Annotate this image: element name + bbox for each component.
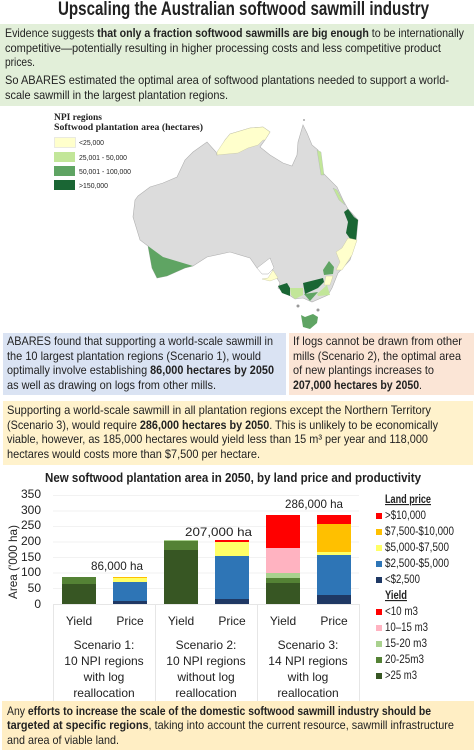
panel: scenario 1 finding: as well as drawing on logs from other mills.	[7, 378, 216, 392]
scenario 3 label: reallocation	[277, 686, 339, 700]
map legend: Softwood plantation area (hectares)	[54, 122, 203, 132]
panel: scenario 3 finding: viable, however, as 185,000 hectares would yield less than 15 m³ per year and 118,000	[7, 432, 428, 446]
panel: scenario 3 finding: Supporting a world-scale sawmill in all plantation regions except the Northern Territory	[7, 403, 431, 417]
scenario 2 price bar	[215, 540, 249, 604]
chart legend: 20-25m3	[385, 654, 424, 666]
total labels	[91, 497, 343, 573]
y axis: 150	[21, 550, 41, 564]
panel: scenario 1 finding: ABARES found that supporting a world-scale sawmill in	[7, 334, 273, 348]
panel: scenario 2 finding	[289, 333, 474, 395]
scenario 1 yield bar	[62, 577, 96, 604]
panel: scenario 1 finding	[3, 333, 286, 395]
scenario 3 label: 14 NPI regions	[268, 654, 348, 668]
chart legend: <$2,500	[385, 574, 420, 586]
panel: scenario 3 finding: (Scenario 3), would require 286,000 hectares by 2050. This is unlikely to be economically	[7, 418, 438, 432]
panel: scenario 2 finding: If logs cannot be drawn from other	[293, 334, 462, 348]
scenario 1 label: reallocation	[73, 686, 135, 700]
panel: scenario 1 finding: the 10 largest plantation regions (Scenario 1), would	[7, 349, 261, 363]
panel: scenario 2 finding: 207,000 hectares by 2050.	[293, 378, 422, 392]
map legend: 50,001 - 100,000	[79, 167, 131, 176]
scenario 3 price bar	[317, 515, 351, 604]
scenario 3 yield bar	[266, 515, 300, 604]
category labels	[66, 614, 348, 628]
y axis	[21, 487, 41, 611]
scenario 2 label: without log	[176, 670, 235, 684]
chart legend: $2,500-$5,000	[385, 558, 449, 570]
panel: introduction: prices.	[5, 55, 35, 69]
y axis: 300	[21, 503, 41, 517]
map legend	[54, 112, 203, 190]
panel: introduction: competitive—potentially resulting in higher processing costs and less competitive product	[5, 41, 442, 55]
scenario 2 label: 10 NPI regions	[166, 654, 246, 668]
total labels: 207,000 ha	[185, 525, 252, 539]
panel: introduction: So ABARES estimated the optimal area of softwood plantations needed to support a world-	[5, 73, 449, 87]
category labels: Yield	[270, 614, 296, 628]
scenario 1 label: with log	[83, 670, 124, 684]
scenario 2 label	[166, 638, 246, 700]
chart legend: <10 m3	[385, 606, 418, 618]
panel: scenario 1 finding: optimally involve establishing 86,000 hectares by 2050	[7, 363, 274, 377]
chart legend: $5,000-$7,500	[385, 542, 449, 554]
panel: scenario 3 finding	[3, 401, 473, 465]
chart legend	[376, 494, 454, 682]
category labels: Price	[116, 614, 144, 628]
map legend: NPI regions	[54, 112, 103, 122]
panel: scenario 2 finding: of new plantings increases to	[293, 363, 434, 377]
panel: introduction	[0, 24, 474, 106]
y axis: 350	[21, 487, 41, 501]
scenario 2 label: reallocation	[175, 686, 237, 700]
y axis: 50	[28, 581, 41, 595]
category labels: Yield	[168, 614, 194, 628]
category labels: Price	[320, 614, 348, 628]
australia map shapes	[133, 119, 358, 329]
scenario 1 price bar	[113, 577, 147, 604]
chart legend: $7,500-$10,000	[385, 526, 454, 538]
y axis title: Area ('000 ha)	[6, 525, 20, 599]
scenario 1 label: Scenario 1:	[74, 638, 134, 652]
scenario 1 label: 10 NPI regions	[64, 654, 144, 668]
scenario 2 label: Scenario 2:	[176, 638, 236, 652]
scenario 1 label	[64, 638, 144, 700]
y axis: 0	[34, 597, 41, 611]
chart legend: Land price	[385, 494, 431, 506]
panel: scenario 2 finding: mills (Scenario 2), the optimal area	[293, 349, 461, 363]
scenario 3 label: with log	[287, 670, 328, 684]
total labels: 86,000 ha	[91, 559, 143, 573]
category labels: Yield	[66, 614, 92, 628]
map legend: >150,000	[79, 181, 108, 190]
y axis: 100	[21, 565, 41, 579]
map legend: 25,001 - 50,000	[79, 153, 127, 162]
chart legend: >$10,000	[385, 510, 426, 522]
chart legend: Yield	[385, 590, 407, 602]
panel: conclusion: targeted at specific regions, taking into account the current resource, sawmill infrastructure	[7, 718, 454, 732]
scenario 3 label	[268, 638, 348, 700]
panel: introduction: scale sawmill in the largest plantation regions.	[5, 88, 228, 102]
total labels: 286,000 ha	[285, 497, 343, 511]
panel: conclusion: and area of viable land.	[7, 733, 119, 747]
y axis: 250	[21, 518, 41, 532]
scenario 2 yield bar	[164, 540, 198, 604]
category labels: Price	[218, 614, 246, 628]
chart title: New softwood plantation area in 2050, by land price and productivity	[45, 471, 421, 485]
stacked bar chart	[6, 487, 360, 701]
chart legend: >25 m3	[385, 670, 417, 682]
chart legend: 15-20 m3	[385, 638, 427, 650]
map: NPI regions softwood plantation area	[54, 112, 358, 329]
panel: scenario 3 finding: hectares would costs more than $7,500 per hectare.	[7, 447, 260, 461]
map legend: <25,000	[79, 138, 104, 147]
scenario 3 label: Scenario 3:	[278, 638, 338, 652]
panel: introduction: Evidence suggests that only a fraction softwood sawmills are big enough to be internationally	[5, 26, 464, 40]
y axis: 200	[21, 534, 41, 548]
chart legend: 10–15 m3	[385, 622, 428, 634]
panel: conclusion	[2, 701, 474, 750]
